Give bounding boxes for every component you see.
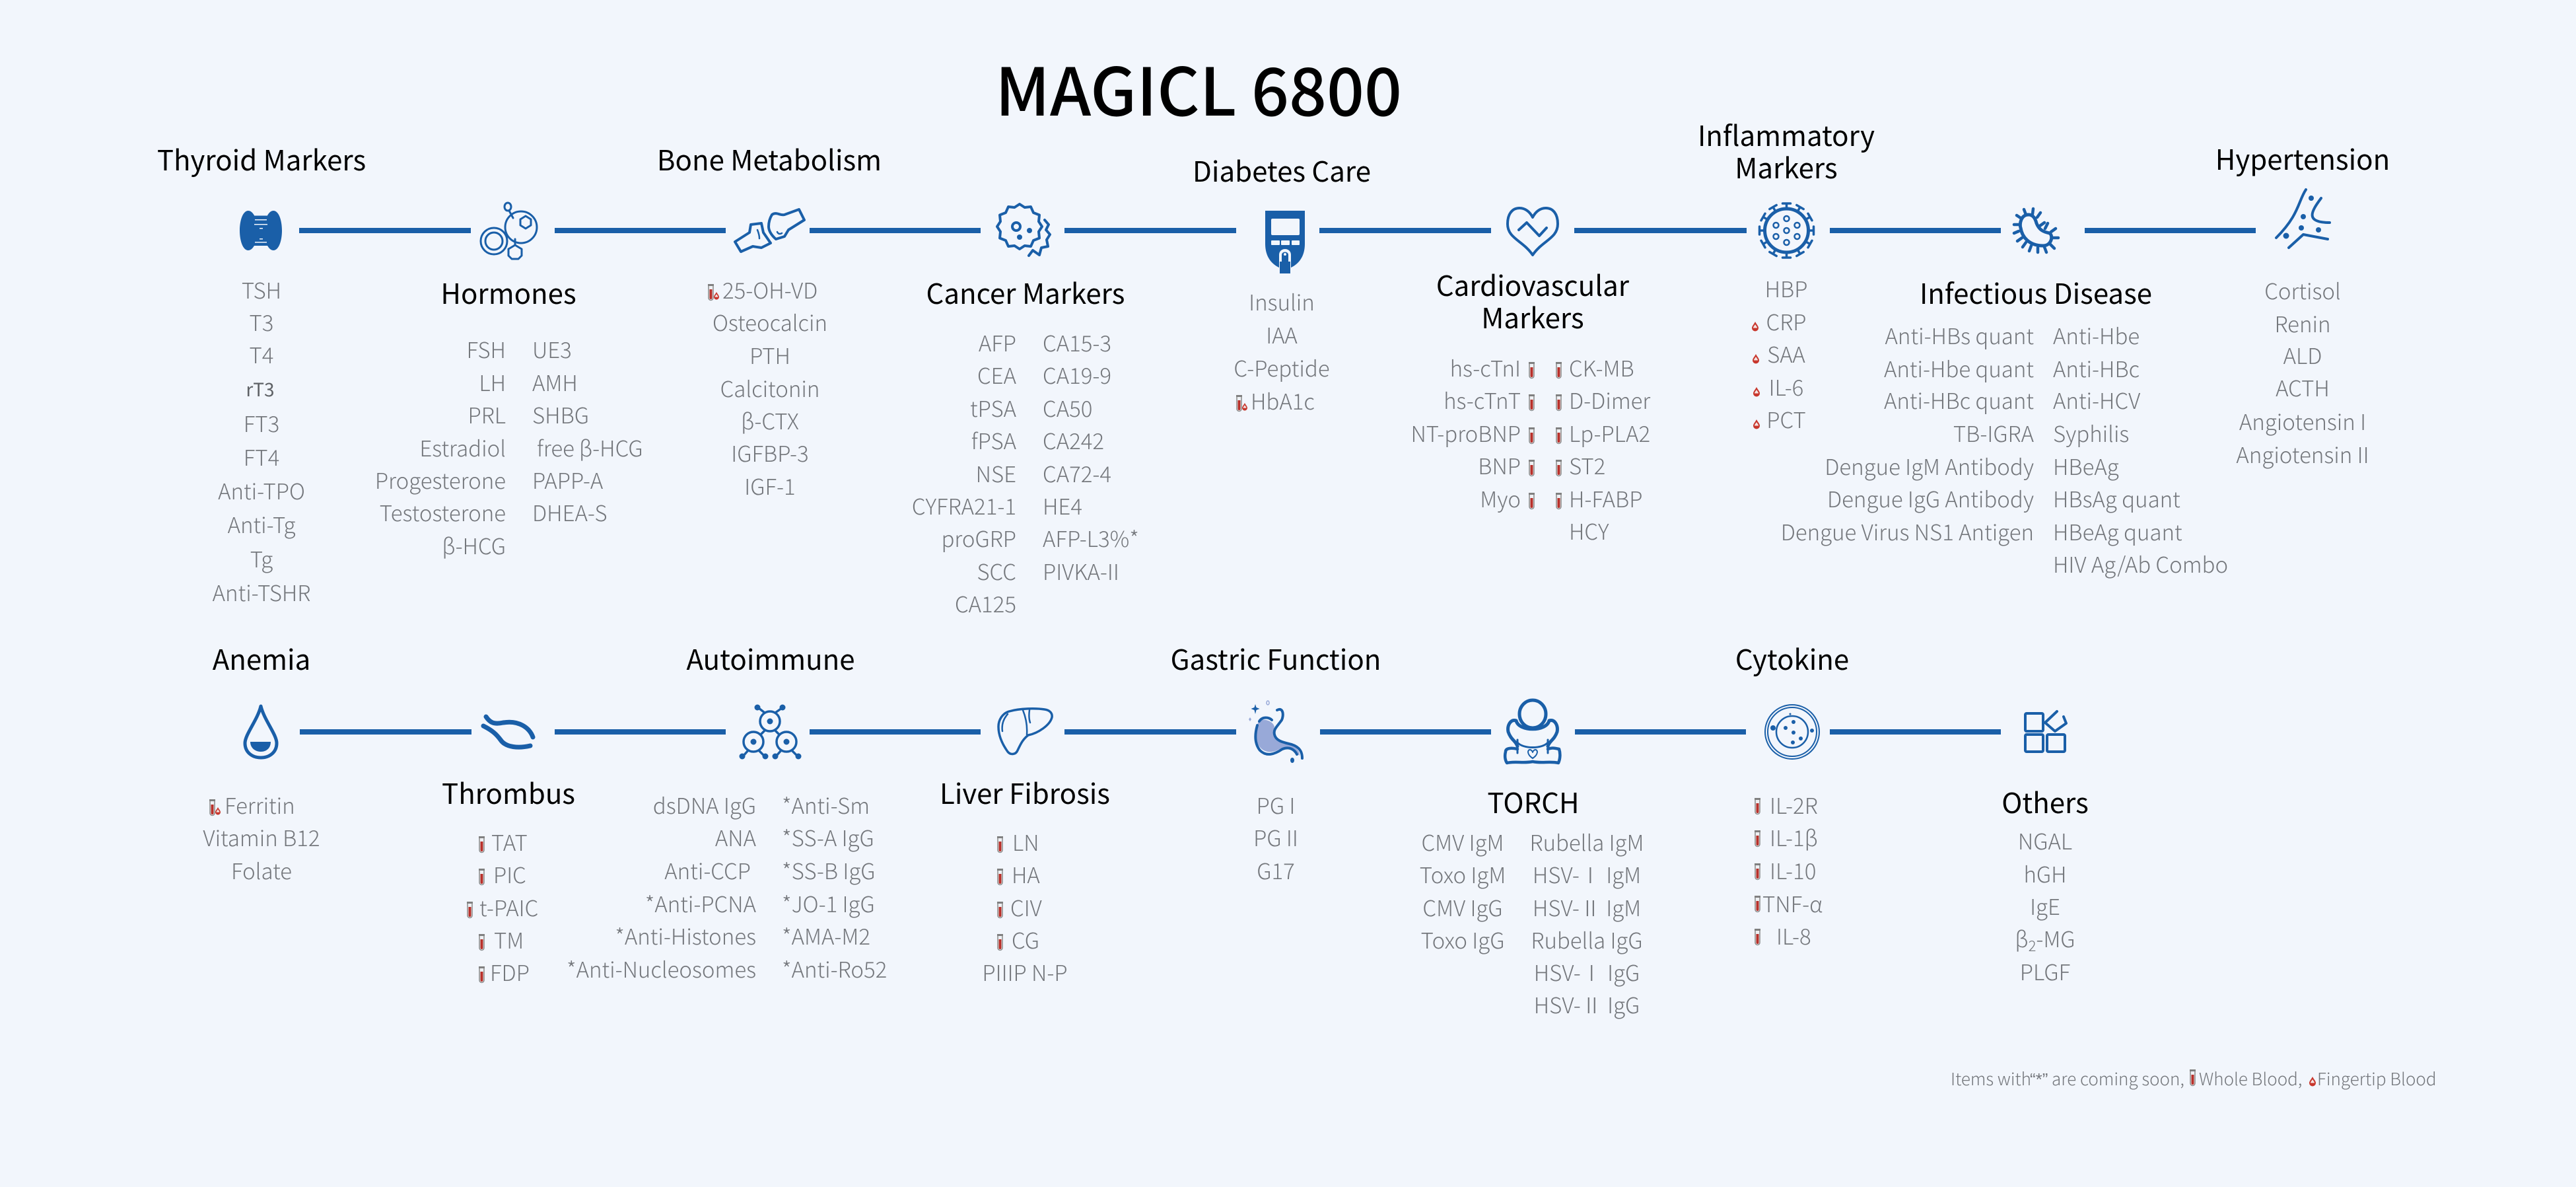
items list: TSH <box>242 273 281 305</box>
items: left column: CA125 <box>955 587 1016 619</box>
heading: Cytokine <box>1735 638 1849 678</box>
items list: Renin <box>2274 307 2331 339</box>
panel: bone metabolism <box>657 139 882 501</box>
items: right column: ST2 <box>1569 449 1605 481</box>
items list: G17 <box>1257 854 1295 886</box>
items: left column: *Anti-PCNA <box>645 887 757 919</box>
items list: ALD <box>2283 339 2322 371</box>
items: right column: SHBG <box>532 398 589 430</box>
icon: liver <box>998 709 1052 754</box>
icon: petri dish <box>1765 705 1819 759</box>
icon: app blocks <box>2025 711 2066 752</box>
heading: Bone Metabolism <box>657 139 882 179</box>
items: right column: *AMA-M2 <box>782 919 870 951</box>
items: left column: CEA <box>977 359 1017 390</box>
items list: IGFBP-3 <box>731 437 809 468</box>
items list: Osteocalcin <box>713 306 827 338</box>
items list: TNF-α <box>1762 887 1823 919</box>
items: right column: HBeAg quant <box>2053 515 2182 547</box>
items list: FDP <box>490 956 530 988</box>
items: right column: Anti-Hbe <box>2053 319 2140 351</box>
items: left column <box>567 789 757 984</box>
items list <box>2236 274 2369 470</box>
items list: C-Peptide <box>1234 351 1330 383</box>
items: left column: Anti-Hbe quant <box>1884 352 2034 384</box>
items: left column <box>1781 319 2035 547</box>
items list <box>1234 285 1330 416</box>
items: left column: SCC <box>977 555 1016 587</box>
items list: Insulin <box>1249 285 1315 317</box>
items list: Cortisol <box>2264 274 2341 306</box>
panel: cardiovascular markers <box>1410 208 1650 546</box>
items: left column: Toxo IgG <box>1421 923 1504 955</box>
items list: HBP <box>1765 272 1807 304</box>
items list: Angiotensin I <box>2239 405 2366 437</box>
items: left column: NSE <box>976 457 1016 489</box>
items: right column: AMH <box>532 366 578 398</box>
items: left column: Dengue IgG Antibody <box>1827 482 2034 514</box>
connector lines: row 1 <box>299 228 2256 233</box>
items: left column: Anti-HBc quant <box>1884 384 2034 415</box>
icon: heart pulse <box>1508 208 1558 255</box>
icon: blood drop <box>245 706 277 758</box>
items list: CRP <box>1766 305 1806 337</box>
items: right column: CK-MB <box>1569 351 1634 383</box>
panel: inflammatory markers <box>1698 114 1875 435</box>
items list: IL-6 <box>1769 371 1803 402</box>
items list: TAT <box>491 826 528 857</box>
items: right column: DHEA-S <box>532 496 608 528</box>
icon: virus <box>1759 203 1813 258</box>
items list: CIV <box>1010 891 1043 923</box>
items: right column <box>532 333 643 528</box>
items: right column: Anti-HCV <box>2053 384 2141 415</box>
items list: β-CTX <box>741 404 799 436</box>
items list: PLGF <box>2020 955 2070 987</box>
panel: cancer markers <box>912 204 1139 619</box>
items: right column: PAPP-A <box>532 464 604 495</box>
panel: thrombus <box>442 717 575 988</box>
footnote legend: are coming soon, <box>2052 1066 2184 1091</box>
items: right column: HSV-Ⅰ IgM <box>1533 858 1641 890</box>
items list: T3 <box>250 306 273 338</box>
items list: 25-OH-VD <box>722 273 818 305</box>
items: right column: Rubella IgG <box>1531 923 1643 955</box>
items: left column: BNP <box>1478 449 1521 481</box>
items list: HbA1c <box>1251 384 1315 416</box>
items: left column: Myo <box>1480 482 1521 514</box>
heading: TORCH <box>1487 781 1580 822</box>
items: left column <box>1410 351 1535 514</box>
footnote legend: Whole Blood, <box>2199 1066 2302 1091</box>
items list: PTH <box>749 339 790 371</box>
items: right column: HSV-Ⅱ IgG <box>1534 988 1640 1020</box>
icon: bacteria <box>2014 209 2058 252</box>
panel: cytokine <box>1735 638 1849 951</box>
items list: TM <box>494 923 524 955</box>
items list: β <box>2015 922 2029 954</box>
icon: stomach <box>1249 701 1302 763</box>
items list: -MG <box>2036 922 2075 954</box>
panel: diabetes care <box>1193 150 1371 416</box>
items: right column: CA50 <box>1043 392 1092 423</box>
items: right column <box>1043 326 1139 587</box>
icon: cancer cell <box>997 204 1050 256</box>
items list <box>467 826 538 988</box>
items list <box>213 273 310 608</box>
items: right column: D-Dimer <box>1569 384 1650 415</box>
heading: Diabetes Care <box>1193 150 1371 190</box>
items: right column: CA242 <box>1043 424 1104 456</box>
items list: 2 <box>2029 935 2036 956</box>
items list <box>1752 272 1807 435</box>
items: right column: Lp-PLA2 <box>1569 417 1650 449</box>
items: left column: Dengue IgM Antibody <box>1825 450 2034 482</box>
items list <box>203 789 320 886</box>
items list: IAA <box>1266 318 1298 350</box>
items list: Anti-TSHR <box>213 576 310 608</box>
items: right column: CA19-9 <box>1043 359 1111 390</box>
items: left column: CMV IgG <box>1422 891 1503 923</box>
heading: Thyroid Markers <box>157 139 366 179</box>
footnote legend: Fingertip Blood <box>2317 1066 2437 1091</box>
items list: rT3 <box>246 376 275 402</box>
icon: blood vessel <box>2276 190 2330 248</box>
items: right column: UE3 <box>532 333 572 365</box>
heading: Infectious Disease <box>1920 272 2152 312</box>
heading: Autoimmune <box>686 638 855 678</box>
items: right column: Rubella IgM <box>1530 826 1644 857</box>
connector lines: row 2 <box>300 729 2001 735</box>
items list: LN <box>1012 826 1039 857</box>
items: left column: *Anti-Nucleosomes <box>567 953 756 984</box>
title: MAGICL 6800 <box>995 39 1402 135</box>
items: right column: PIVKA-II <box>1043 555 1119 587</box>
items list: Calcitonin <box>720 372 819 404</box>
items list: SAA <box>1767 338 1805 369</box>
footnote legend: Items with <box>1951 1066 2031 1091</box>
items: right column <box>2053 319 2228 579</box>
items list: HA <box>1012 858 1040 890</box>
panel: anemia <box>203 638 320 886</box>
items list: PIIIP N-P <box>982 956 1068 988</box>
items list: IL-10 <box>1770 854 1816 886</box>
items: right column: HE4 <box>1043 489 1082 521</box>
items: left column: dsDNA IgG <box>653 789 756 820</box>
items: right column: HSV-Ⅱ IgM <box>1533 891 1641 923</box>
icon: glucose meter <box>1265 211 1305 273</box>
items list: ACTH <box>2276 371 2330 403</box>
items: left column: Estradiol <box>419 431 506 463</box>
items: left column: CMV IgM <box>1421 826 1504 857</box>
items list: Folate <box>231 854 292 886</box>
items: right column <box>782 789 887 984</box>
items: right column: HBeAg <box>2053 450 2119 482</box>
items: left column: FSH <box>466 333 506 365</box>
items: right column: CA15-3 <box>1043 326 1111 358</box>
items: right column: AFP-L3%* <box>1043 522 1139 554</box>
panel: liver fibrosis <box>940 709 1110 988</box>
items list <box>2015 824 2075 987</box>
items: left column: PRL <box>468 398 506 430</box>
heading: Thrombus <box>442 772 575 812</box>
panel: gastric function <box>1171 638 1381 886</box>
heading: Liver Fibrosis <box>940 772 1110 812</box>
heading: Cardiovascular <box>1436 264 1630 305</box>
items: right column: HSV-Ⅰ IgG <box>1534 956 1640 988</box>
items: left column: β-HCG <box>442 529 506 561</box>
items list: CG <box>1012 923 1039 955</box>
items: left column: hs-cTnI <box>1450 351 1521 383</box>
items: right column: *SS-A IgG <box>782 821 874 853</box>
items: left column: Dengue Virus NS1 Antigen <box>1781 515 2034 547</box>
items: right column: CA72-4 <box>1043 457 1111 489</box>
items list <box>982 826 1068 988</box>
items list: PCT <box>1766 403 1806 435</box>
items list: Vitamin B12 <box>203 821 320 853</box>
items list: T4 <box>250 338 273 370</box>
items: left column: Toxo IgM <box>1420 858 1506 890</box>
items: left column: Progesterone <box>375 464 506 495</box>
items list: Anti-Tg <box>228 508 295 540</box>
panel: infectious disease <box>1781 209 2228 579</box>
heading: Cancer Markers <box>926 272 1125 312</box>
items list: t-PAIC <box>479 891 538 923</box>
items list: IGF-1 <box>744 470 796 501</box>
items list: hGH <box>2023 857 2067 889</box>
items: left column: fPSA <box>971 424 1017 456</box>
items: left column <box>375 333 506 561</box>
heading: Hypertension <box>2215 138 2390 178</box>
items: right column <box>1556 351 1650 546</box>
items list <box>1253 789 1298 886</box>
items: right column: Syphilis <box>2053 417 2129 449</box>
items: right column: HIV Ag/Ab Combo <box>2053 548 2228 579</box>
items list <box>708 273 827 501</box>
items: left column <box>1420 826 1506 955</box>
icon: baby <box>1505 700 1560 763</box>
items list: FT4 <box>244 441 279 472</box>
items: left column <box>912 326 1017 619</box>
panel: hormones <box>375 203 643 561</box>
items: right column: *SS-B IgG <box>782 854 876 886</box>
panel: hypertension <box>2215 138 2390 470</box>
heading: Others <box>2002 781 2089 822</box>
items list <box>1755 789 1823 951</box>
items: left column: AFP <box>979 326 1016 358</box>
icon: bone joint <box>735 209 804 252</box>
items: left column: CYFRA21-1 <box>912 489 1016 521</box>
items list: Anti-TPO <box>218 474 305 506</box>
footnote legend <box>1951 1066 2437 1091</box>
items: left column: Anti-CCP <box>664 854 751 886</box>
items: left column: hs-cTnT <box>1444 384 1521 415</box>
items list: PG II <box>1253 821 1298 853</box>
items: right column: *Anti-Sm <box>782 789 870 820</box>
items list: IL-2R <box>1770 789 1818 820</box>
items: right column: *Anti-Ro52 <box>782 953 887 984</box>
heading: Anemia <box>213 638 310 678</box>
items list: PIC <box>493 858 526 890</box>
panel: autoimmune <box>567 638 887 984</box>
icon: blood vessels <box>483 717 533 747</box>
items list: IgE <box>2030 890 2060 921</box>
items: left column: TB-IGRA <box>1953 417 2035 449</box>
icon: molecules <box>481 203 537 259</box>
items: left column: *Anti-Histones <box>615 919 756 951</box>
items: left column: ANA <box>715 821 757 853</box>
items: left column: proGRP <box>941 522 1016 554</box>
items: left column: Testosterone <box>380 496 506 528</box>
heading: Inflammatory <box>1698 114 1875 155</box>
panel: TORCH <box>1420 700 1644 1020</box>
items: right column: HCY <box>1569 515 1609 546</box>
items: right column: *JO-1 IgG <box>782 887 875 919</box>
items list: Angiotensin II <box>2236 438 2369 470</box>
items list: Ferritin <box>225 789 295 820</box>
items list: IL-1β <box>1770 821 1818 853</box>
items: right column: free β-HCG <box>537 431 643 463</box>
panel: others <box>2002 711 2089 987</box>
items: right column <box>1530 826 1644 1020</box>
items list: FT3 <box>244 407 279 439</box>
items list: Tg <box>250 542 273 574</box>
footnote legend: “*” <box>2030 1069 2048 1089</box>
heading line 2: Markers <box>1735 147 1838 187</box>
items list: NGAL <box>2018 824 2072 856</box>
items list: IL-8 <box>1776 919 1811 951</box>
items: right column: H-FABP <box>1569 482 1642 514</box>
heading: Gastric Function <box>1171 638 1381 678</box>
items: left column: Anti-HBs quant <box>1885 319 2034 351</box>
icon: immune cells <box>740 704 802 760</box>
items list: PG I <box>1257 789 1295 820</box>
items: right column: HBsAg quant <box>2053 482 2180 514</box>
heading: Hormones <box>440 272 576 312</box>
items: left column: NT-proBNP <box>1410 417 1521 449</box>
items: left column: LH <box>479 366 506 398</box>
heading line 2: Markers <box>1481 297 1584 337</box>
items: right column: Anti-HBc <box>2053 352 2140 384</box>
icon: thyroid <box>240 211 282 250</box>
panel: thyroid markers <box>157 139 366 608</box>
items: left column: tPSA <box>970 392 1017 423</box>
